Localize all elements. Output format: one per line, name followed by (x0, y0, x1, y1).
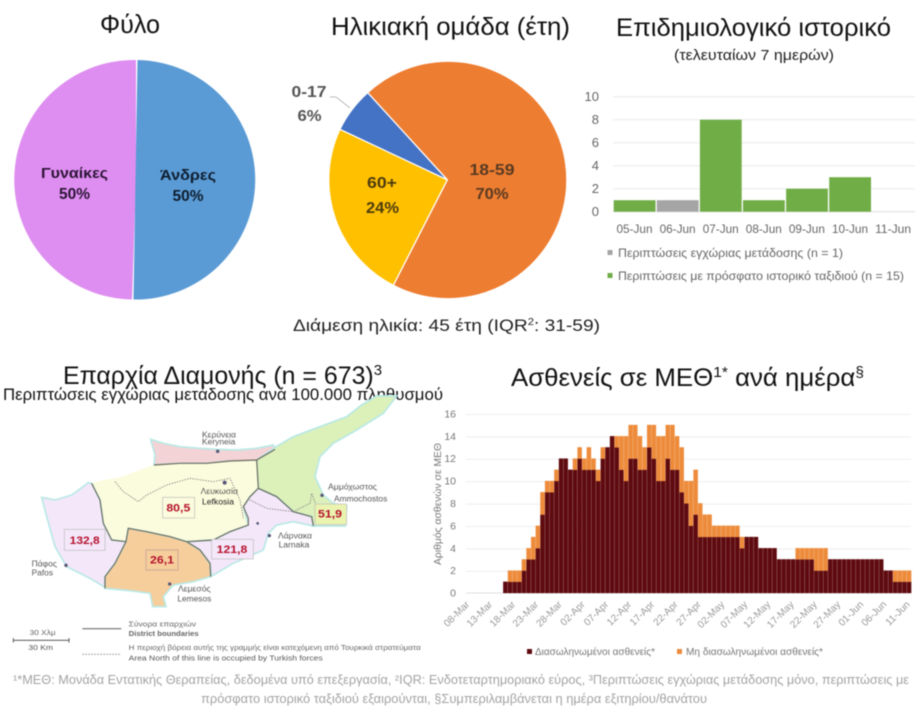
y axis labels: 2 (450, 565, 456, 577)
y axis labels: 8 (450, 498, 456, 510)
place labels: Πάφος (32, 560, 57, 569)
district: Larnaca (187, 488, 313, 576)
x axis labels: 09-Jun (789, 222, 825, 236)
bar: local transmission (657, 200, 699, 212)
label: women: Γυναίκες (41, 165, 108, 182)
place labels: Αμμόχωστος (328, 482, 377, 491)
x axis date labels: 11-Jun (884, 599, 913, 628)
scale bar: 30 Km (28, 645, 53, 652)
x axis date labels: 18-Mar (488, 599, 519, 630)
x axis labels: 10-Jun (832, 222, 868, 236)
x axis labels: 06-Jun (660, 222, 696, 236)
scale bar (13, 630, 69, 652)
x axis date labels: 12-Apr (605, 599, 635, 628)
panel: ICU patients per day (432, 364, 913, 658)
scale bar: 30 Χλμ (30, 630, 56, 637)
x axis date labels: 12-May (742, 599, 773, 631)
place labels: Keryneia (202, 438, 236, 447)
y axis title: Αριθμός ασθενών σε ΜΕΘ (432, 443, 444, 565)
label: 60+: 60+ (367, 175, 397, 192)
value: 18-59: 70% (476, 186, 509, 203)
pie slice: 18-59 (368, 61, 567, 299)
panel: sex pie (14, 9, 255, 300)
bar chart: ICU (432, 408, 913, 631)
y axis labels: 2 (592, 181, 599, 196)
median age note: 2 (528, 317, 534, 328)
y axis labels: 8 (592, 112, 599, 127)
x axis labels: 08-Jun (746, 222, 782, 236)
y axis labels: 0 (592, 204, 599, 219)
y axis labels (444, 408, 456, 600)
subheading: per 100,000: Περιπτώσεις εγχώριας μετάδοσης ανά 100.000 πληθυσμού (3, 386, 443, 404)
y axis labels: 14 (444, 431, 456, 443)
x axis date labels: 02-May (696, 599, 727, 631)
value box: Lefkosia: 80,5 (166, 502, 190, 514)
value: men: 50% (172, 188, 204, 205)
x axis date labels: 17-May (765, 599, 797, 631)
legend: intubated: Διασωληνωμένοι ασθενείς* (535, 646, 655, 658)
footnotes: ¹*ΜΕΘ: Μονάδα Εντατικής Θεραπείας, δεδομένα υπό επεξεργασία, ²IQR: Ενδοτεταρτημοριακό εύρος, ³Περιπτώσεις εγχώριας μετάδοσης μόνο, περιπτώσεις με (13, 673, 909, 687)
place labels (32, 431, 387, 603)
bars: intubated patients (503, 436, 911, 593)
y axis labels: 10 (444, 476, 456, 488)
x axis date labels: 17-Apr (628, 599, 658, 628)
value box: Lemesos (146, 550, 178, 570)
footnotes: πρόσφατο ιστορικό ταξιδιού εξαιρούνται, §Συμπεριλαμβάνεται η ημέρα εξιτηρίου/θανάτου (201, 692, 707, 706)
legend: local transmission: Περιπτώσεις εγχώριας μετάδοσης (n = 1) (618, 246, 843, 260)
panel: epidemiological history (585, 14, 915, 283)
district: Kyrenia (151, 439, 276, 465)
y axis labels: 4 (592, 158, 599, 173)
x axis labels: 05-Jun (616, 222, 652, 236)
label: men: Άνδρες (160, 167, 216, 184)
leader line (330, 97, 350, 108)
bar chart: daily cases (585, 89, 915, 236)
heading: ICU patients: ανά ημέρα (728, 364, 855, 392)
district: Lemesos (105, 528, 211, 607)
place labels: Larnaka (279, 541, 310, 550)
y axis labels: 0 (450, 588, 456, 600)
pie slice: 0-17 (340, 93, 447, 180)
district: Pafos (42, 483, 126, 587)
district boundaries (92, 449, 313, 588)
y axis labels: 12 (444, 453, 456, 465)
x axis date labels: 23-Mar (511, 599, 542, 630)
x axis labels: 11-Jun (875, 222, 911, 236)
pie slice: men (134, 60, 255, 300)
district: Ammochostos (257, 396, 397, 526)
x axis date labels: 27-May (812, 599, 843, 631)
x axis date labels: 28-Mar (534, 599, 565, 630)
heading: epidemiological history: Επιδημιολογικό ιστορικό (616, 14, 891, 42)
pie slice: 60+ (329, 129, 447, 285)
place labels: Lefkosia (202, 497, 235, 506)
x axis date labels: 27-Apr (675, 599, 704, 628)
x axis date labels: 22-May (788, 599, 820, 631)
value box: Lemesos: 26,1 (150, 555, 174, 567)
median age note: : 31-59) (534, 316, 600, 335)
place labels: Pafos (32, 569, 53, 578)
value box: Pafos: 132,8 (70, 535, 100, 547)
x axis date labels: 01-Jun (837, 599, 866, 629)
heading: ICU patients: 1* (713, 364, 728, 381)
value: women: 50% (59, 186, 90, 203)
y axis labels: 10 (585, 89, 599, 104)
place labels: Λευκωσία (201, 487, 238, 496)
y axis labels: 6 (592, 135, 599, 150)
panel: district map (3, 362, 443, 662)
x axis date labels: 07-May (719, 599, 750, 631)
legend: district boundaries (82, 620, 199, 638)
heading: district of residence: 3 (374, 362, 382, 379)
label: 18-59: 18-59 (470, 162, 515, 179)
x axis date labels: 06-Jun (860, 599, 889, 629)
value box: Ammochostos: 51,9 (318, 508, 342, 520)
y axis labels: 4 (450, 543, 456, 555)
legend: non-intubated: Μη διασωληνωμένοι ασθενείς* (686, 646, 823, 658)
x axis date labels: 08-Mar (442, 599, 473, 630)
value box: Ammochostos (315, 504, 347, 525)
value box: Pafos (64, 529, 105, 550)
bars: recent travel history (614, 120, 871, 212)
place labels: Ammochostos (334, 495, 387, 504)
heading: ICU patients: Ασθενείς σε ΜΕΘ (511, 364, 707, 392)
place labels: Lemesos (177, 594, 211, 603)
heading: sex: Φύλο (100, 9, 160, 39)
x axis date labels (442, 599, 913, 631)
heading: age group: Ηλικιακή ομάδα (έτη) (331, 13, 570, 41)
legend: occupied area: Area North of this line is occupied by Turkish forces (129, 655, 323, 662)
legend: occupied area (82, 643, 421, 662)
y axis labels: 6 (450, 520, 456, 532)
panel: age group pie (292, 13, 600, 335)
value box: Larnaca (212, 539, 253, 559)
occupied area line (115, 478, 317, 518)
bars: non-intubated patients (508, 425, 911, 582)
district: Lefkosia (92, 460, 258, 542)
legend: recent travel: Περιπτώσεις με πρόσφατο ιστορικό ταξιδιού (n = 15) (618, 269, 904, 283)
x axis date labels: 13-Mar (465, 599, 496, 630)
place labels: Λεμεσός (178, 585, 211, 594)
place labels: Λάρνακα (278, 532, 312, 541)
y axis labels (585, 89, 599, 219)
heading: district of residence: Επαρχία Διαμονής (n = 673) (63, 362, 375, 390)
value: 0-17: 6% (298, 108, 322, 125)
place labels: Κερύνεια (202, 431, 236, 440)
x axis date labels: 22-Apr (652, 599, 681, 628)
legend: district boundaries: District boundaries (129, 631, 199, 638)
subheading: last 7 days: (τελευταίων 7 ημερών) (674, 47, 834, 64)
footnotes (13, 673, 909, 706)
value: 60+: 24% (366, 200, 399, 217)
x axis date labels: 07-Apr (582, 599, 612, 628)
value box: Larnaca: 121,8 (217, 544, 247, 556)
map of Cyprus (13, 396, 421, 662)
x axis date labels: 02-Apr (559, 599, 588, 628)
pie slice: women (14, 60, 136, 300)
median age note: Διάμεση ηλικία: 45 έτη (IQR (293, 316, 501, 335)
value box: Lefkosia (163, 497, 195, 518)
x axis labels: 07-Jun (703, 222, 739, 236)
legend: district boundaries: Σύνορα επαρχιών (129, 620, 196, 629)
heading: ICU patients: § (855, 364, 864, 381)
city dots (64, 450, 324, 586)
x axis labels (616, 222, 911, 236)
legend: occupied area: Η περιοχή βόρεια αυτής της γραμμής είναι κατεχόμενη από Τουρκικά στρατεύματα (129, 643, 421, 652)
y axis labels: 16 (444, 408, 456, 420)
label: 0-17: 0-17 (292, 84, 326, 101)
